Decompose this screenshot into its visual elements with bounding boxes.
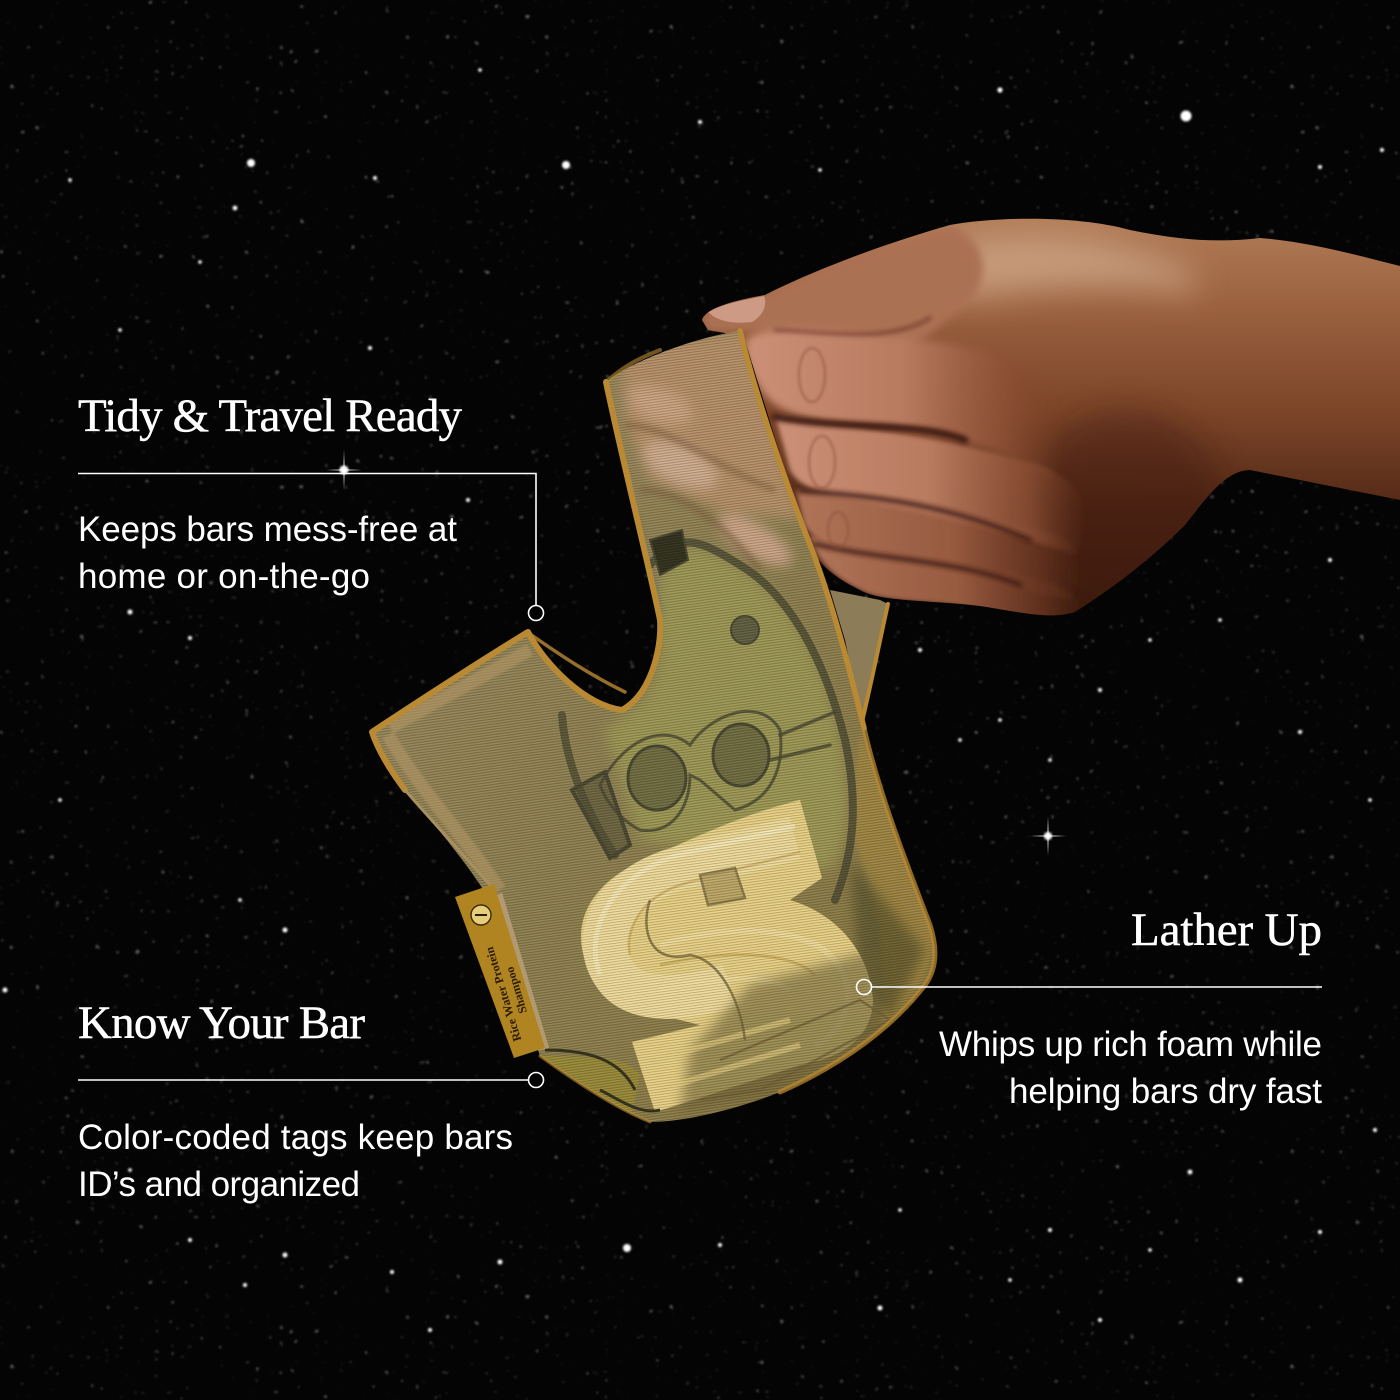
back flap of pouch xyxy=(830,590,888,722)
leader dot xyxy=(528,606,544,620)
index finger xyxy=(744,327,1048,466)
soap dollar and art overlay xyxy=(646,868,890,1100)
heading: Lather Up xyxy=(1131,904,1322,956)
thumb xyxy=(702,225,983,352)
highlight on knuckles xyxy=(900,236,1198,298)
orange stitched edges xyxy=(372,331,935,1122)
description: Keeps bars mess-free at xyxy=(78,510,457,549)
pale green yellow printed face xyxy=(605,548,847,870)
thumb nail xyxy=(708,296,765,323)
hand and wrist xyxy=(690,210,1400,630)
leader line xyxy=(78,474,536,605)
mesh pouch xyxy=(360,320,950,1140)
shadow on hand side xyxy=(1044,402,1221,540)
leader line xyxy=(872,986,1322,988)
left lobe inner band xyxy=(388,650,530,890)
mesh shadow on lower soap xyxy=(680,950,885,1112)
fingers seen through mesh xyxy=(620,330,800,576)
mesh texture xyxy=(360,320,950,1140)
leader line xyxy=(78,1079,528,1081)
heading: Tidy & Travel Ready xyxy=(78,390,462,442)
woven label tag: Shampoo xyxy=(502,965,530,1015)
woven label tag: Rice Water Protein xyxy=(482,945,524,1043)
dark lower right mesh xyxy=(850,860,925,1020)
right side warm panel xyxy=(855,737,932,1020)
heading: Know Your Bar xyxy=(78,997,365,1049)
callout: Lather Up xyxy=(856,904,1322,1111)
description: Color-coded tags keep bars xyxy=(78,1118,513,1157)
finger shadow bands on flap xyxy=(625,425,775,570)
finger knuckle wrinkles xyxy=(799,348,848,548)
finger creases xyxy=(775,318,1030,585)
lower soap highlight stripes xyxy=(680,1017,801,1086)
little finger xyxy=(810,534,1070,616)
ribbed tag seam xyxy=(495,895,542,1050)
face line art xyxy=(562,530,853,900)
ring finger xyxy=(796,490,1082,600)
woven label tag xyxy=(455,884,545,1058)
description: home or on-the-go xyxy=(78,557,370,596)
description: helping bars dry fast xyxy=(1009,1072,1322,1111)
leader dot xyxy=(856,980,872,994)
description: ID’s and organized xyxy=(78,1165,360,1204)
callout: Tidy & Travel Ready xyxy=(78,390,544,620)
callout: Know Your Bar xyxy=(78,997,544,1204)
sparkle star upper left xyxy=(326,450,362,490)
soap bar shampoo shape xyxy=(581,800,873,1112)
arm and back of hand xyxy=(690,210,1400,630)
pouch body xyxy=(372,331,935,1122)
middle finger xyxy=(775,415,1086,555)
description: Whips up rich foam while xyxy=(939,1025,1322,1064)
bottom left yellow print xyxy=(542,1055,640,1114)
sparkle star right xyxy=(1030,816,1066,856)
leader dot xyxy=(528,1072,544,1088)
